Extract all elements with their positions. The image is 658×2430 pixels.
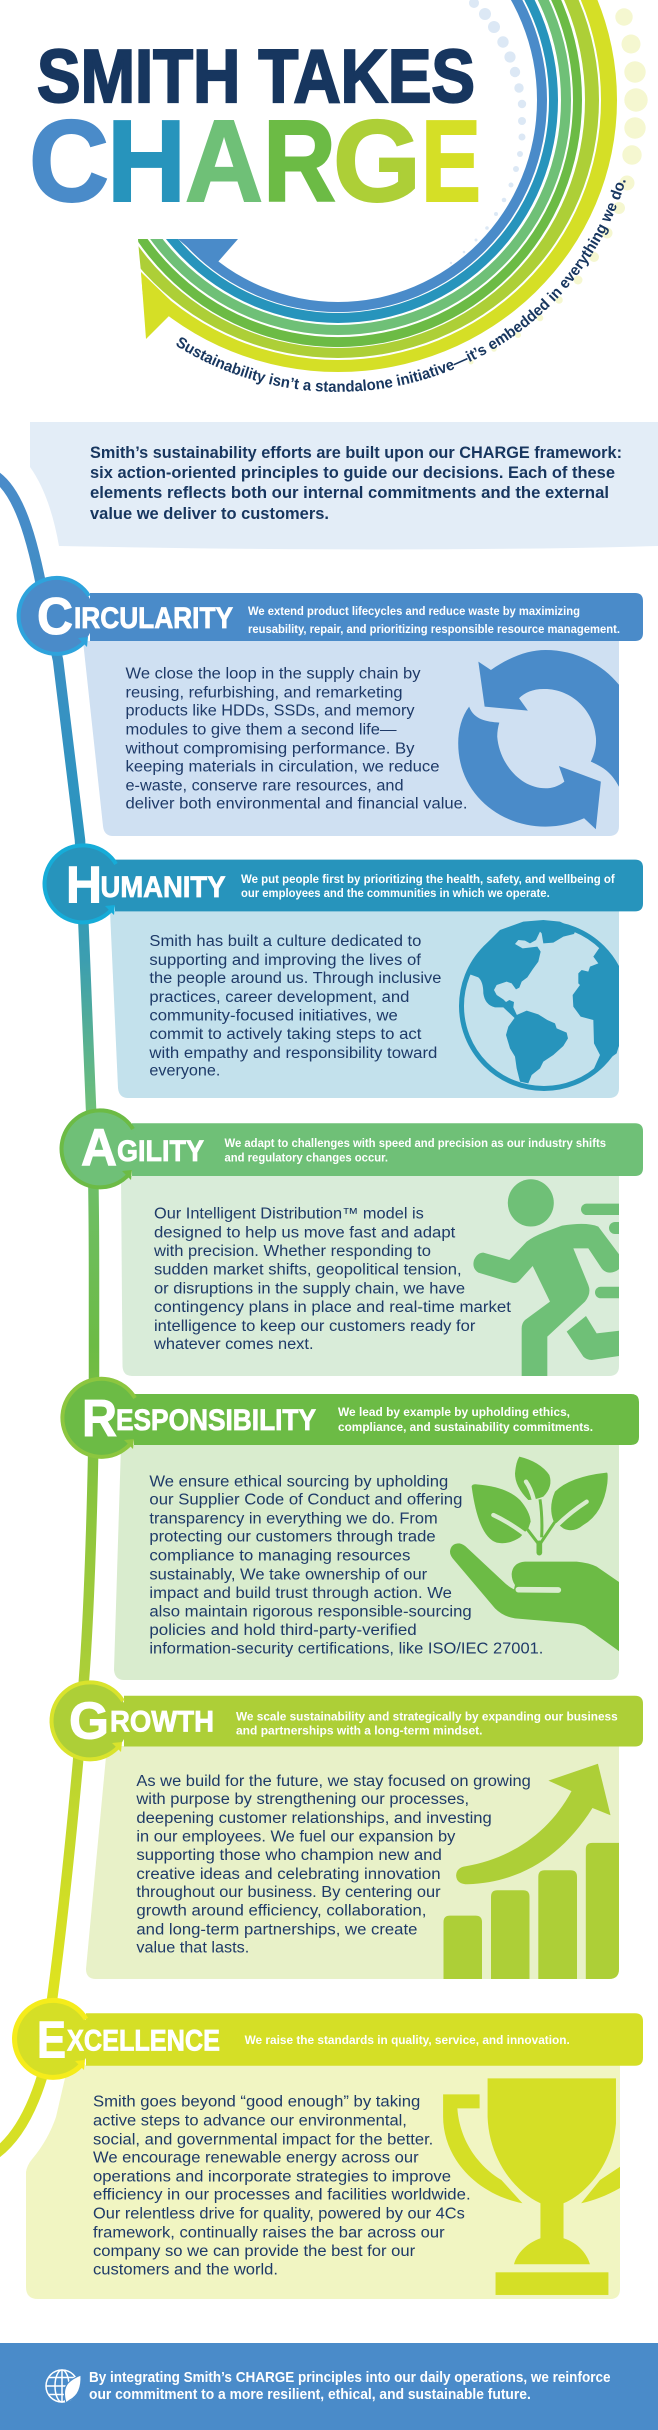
text: Responsibility body: information-security certifications, like ISO/IEC 27001. xyxy=(149,1641,543,1658)
text: Agility body: designed to help us move fast and adapt xyxy=(154,1224,456,1242)
banner: Agility: We adapt to challenges with speed and precision as our industry shifts xyxy=(224,1138,606,1150)
badge: Growth: G xyxy=(69,1692,109,1750)
text: Circularity body xyxy=(124,665,467,812)
text: Humanity body: everyone. xyxy=(149,1063,220,1080)
text: Growth body: creative ideas and celebrating innovation xyxy=(136,1866,441,1883)
title: CHARGE: G xyxy=(333,96,421,226)
text: Growth body: and long-term partnerships, we create xyxy=(136,1922,417,1938)
footer band xyxy=(0,2343,658,2430)
badge: Responsibility xyxy=(62,1379,316,1457)
text: Responsibility body: compliance to managing resources xyxy=(149,1547,411,1564)
badge: Responsibility: R xyxy=(82,1390,117,1448)
text: Responsibility body: policies and hold third-party-verified xyxy=(149,1622,417,1639)
text: Circularity body: deliver both environmental and financial value. xyxy=(126,795,467,812)
icon: globe with leaf xyxy=(46,2370,81,2403)
section: Humanity xyxy=(45,845,643,1098)
banner: Circularity: We extend product lifecycles and reduce waste by maximizing xyxy=(248,606,580,618)
banner: Excellence: We raise the standards in quality, service, and innovation. xyxy=(245,2035,570,2047)
text: Circularity body: modules to give them a second life— xyxy=(126,721,397,738)
text: Growth body: value that lasts. xyxy=(136,1940,249,1957)
text: Agility body: sudden market shifts, geopolitical tension, xyxy=(154,1262,462,1279)
panel: Agility body xyxy=(121,1176,619,1376)
rainbow circular arrow xyxy=(138,0,617,372)
badge: Responsibility: ESPONSIBILITY xyxy=(116,1404,316,1437)
banner: Responsibility: We lead by example by upholding ethics, xyxy=(338,1407,570,1419)
text: Responsibility body xyxy=(149,1474,543,1658)
title: Smith Takes: SMITH TAKES xyxy=(37,34,475,118)
text: Excellence body: Our relentless drive for quality, powered by our 4Cs xyxy=(93,2206,465,2223)
text: closing statement: By integrating Smith’s CHARGE principles into our daily operations, we reinforce xyxy=(89,2369,610,2386)
title: CHARGE: H xyxy=(107,96,186,226)
text: Excellence body xyxy=(93,2094,471,2279)
badge: Circularity xyxy=(18,578,233,654)
text: Agility body: intelligence to keep our customers ready for xyxy=(154,1318,475,1335)
text: Growth body: deepening customer relationships, and investing xyxy=(136,1810,492,1827)
text: Excellence body: operations and incorporate strategies to improve xyxy=(93,2169,451,2186)
panel: Responsibility body xyxy=(114,1445,619,1680)
text: Responsibility body: sustainably, We take ownership of our xyxy=(149,1567,427,1584)
title: CHARGE: R xyxy=(263,96,336,226)
text: Circularity body: products like HDDs, SSDs, and memory xyxy=(126,702,415,719)
banner: Growth: and partnerships with a long-term mindset. xyxy=(236,1725,482,1737)
panel: Excellence body xyxy=(26,2065,620,2299)
badge: Humanity: H xyxy=(66,856,102,914)
banner: Responsibility: compliance, and sustainability commitments. xyxy=(338,1422,593,1434)
text: Responsibility body: protecting our customers through trade xyxy=(149,1529,436,1546)
badge: Agility: GILITY xyxy=(117,1135,204,1168)
section: Growth xyxy=(52,1682,643,1990)
text: Excellence body: customers and the world. xyxy=(93,2262,278,2279)
text: Growth body: growth around efficiency, collaboration, xyxy=(136,1903,426,1920)
badge: Growth xyxy=(52,1682,214,1760)
text: Humanity body: community-focused initiatives, we xyxy=(149,1008,398,1025)
text: Circularity body: reusing, refurbishing, and remarketing xyxy=(126,684,402,701)
text: Growth body: As we build for the future, we stay focused on growing xyxy=(136,1773,531,1790)
text: Agility body: or disruptions in the supply chain, we have xyxy=(154,1281,465,1298)
banner: Growth: We scale sustainability and strategically by expanding our business xyxy=(236,1711,618,1723)
text: Excellence body: social, and governmental impact for the better. xyxy=(93,2132,433,2149)
banner: Humanity: our employees and the communities in which we operate. xyxy=(241,888,550,900)
text: Growth body: with purpose by strengthening our processes, xyxy=(135,1791,469,1808)
banner: Responsibility xyxy=(134,1394,639,1445)
badge: Circularity: C xyxy=(37,588,73,646)
banner: Excellence xyxy=(86,2013,643,2066)
text: Excellence body: framework, continually raises the bar across our xyxy=(93,2225,445,2242)
text: closing statement xyxy=(89,2369,610,2403)
text: Agility body: whatever comes next. xyxy=(153,1336,314,1353)
text: Responsibility body: We ensure ethical sourcing by upholding xyxy=(149,1474,448,1490)
section: Agility xyxy=(62,1110,645,1380)
text: Responsibility body: also maintain rigorous responsible-sourcing xyxy=(149,1604,472,1621)
text: closing statement: our commitment to a more resilient, ethical, and sustainable future. xyxy=(89,2386,531,2403)
text: Excellence body: active steps to advance our environmental, xyxy=(93,2113,407,2130)
intro panel xyxy=(30,422,658,550)
text: Circularity body: keeping materials in circulation, we reduce xyxy=(126,758,440,775)
banner: Circularity xyxy=(90,593,643,641)
title: CHARGE xyxy=(29,96,481,226)
icon: hand holding plant xyxy=(450,1457,627,1657)
text: Growth body xyxy=(135,1773,531,1957)
text: Responsibility body: transparency in everything we do. From xyxy=(149,1510,438,1528)
text: Circularity body: without compromising performance. By xyxy=(124,740,415,757)
timeline line xyxy=(0,475,94,2155)
text: Circularity body: We close the loop in the supply chain by xyxy=(126,665,421,682)
section: Excellence xyxy=(14,2000,643,2299)
text: Humanity body: Smith has built a culture dedicated to xyxy=(149,933,421,950)
banner: Humanity: We put people first by prioritizing the health, safety, and wellbeing of xyxy=(241,874,615,886)
badge: Agility xyxy=(62,1110,204,1187)
badge: Humanity: UMANITY xyxy=(100,871,226,904)
text: Humanity body: the people around us. Through inclusive xyxy=(149,970,441,987)
section: Responsibility xyxy=(62,1379,639,1680)
text: Humanity body xyxy=(148,933,441,1080)
title: CHARGE: E xyxy=(421,96,481,226)
banner: Agility xyxy=(132,1123,643,1176)
text: Agility body: with precision. Whether responding to xyxy=(153,1243,431,1260)
text: Excellence body: efficiency in our processes and facilities worldwide. xyxy=(93,2186,471,2203)
text: Humanity body: with empathy and responsibility toward xyxy=(148,1045,437,1062)
text: Humanity body: supporting and improving the lives of xyxy=(149,952,422,969)
text: Agility body xyxy=(153,1206,512,1353)
banner: Circularity: reusability, repair, and prioritizing responsible resource management. xyxy=(248,624,620,636)
text: Excellence body: company so we can provide the best for our xyxy=(93,2243,415,2260)
title: CHARGE: A xyxy=(185,96,263,226)
decorative yellow dots xyxy=(468,8,648,365)
icon: trophy xyxy=(443,2078,625,2295)
text: Agility body: Our Intelligent Distribution™ model is xyxy=(154,1206,424,1223)
text: Excellence body: We encourage renewable energy across our xyxy=(93,2150,419,2167)
intro panel: Smith’s sustainability efforts are built upon our CHARGE framework: xyxy=(90,444,622,462)
icon: runner xyxy=(473,1179,619,1376)
panel: Growth body xyxy=(86,1746,619,1979)
section: Circularity xyxy=(18,578,643,836)
badge: Excellence: XCELLENCE xyxy=(67,2025,220,2058)
decorative blue dots xyxy=(450,0,526,264)
badge: Growth: ROWTH xyxy=(110,1706,214,1739)
text: Agility body: contingency plans in place and real-time market xyxy=(154,1299,512,1316)
badge: Excellence xyxy=(14,2000,220,2078)
icon: recycle arrows xyxy=(458,650,634,829)
badge: Excellence: E xyxy=(37,2012,66,2070)
curved tagline: Sustainability isn’t a standalone initiative—it’s embedded in everything we do. xyxy=(176,180,626,392)
text: Growth body: in our employees. We fuel our expansion by xyxy=(136,1828,456,1845)
text: Circularity body: e-waste, conserve rare resources, and xyxy=(126,777,404,794)
icon: globe xyxy=(462,920,627,1088)
text: Humanity body: practices, career development, and xyxy=(149,989,409,1006)
badge: Humanity xyxy=(45,845,226,922)
banner: Humanity xyxy=(115,860,643,911)
text: Excellence body: Smith goes beyond “good enough” by taking xyxy=(93,2094,420,2111)
text: Humanity body: commit to actively taking steps to act xyxy=(149,1026,422,1043)
intro panel: six action-oriented principles to guide our decisions. Each of these xyxy=(90,464,615,482)
icon: growth bars and arrow xyxy=(444,1764,619,1979)
text: Growth body: throughout our business. By centering our xyxy=(136,1884,441,1901)
text: Responsibility body: impact and build trust through action. We xyxy=(149,1585,452,1602)
banner: Growth xyxy=(124,1696,643,1746)
panel: Circularity body xyxy=(83,641,619,836)
banner: Agility: and regulatory changes occur. xyxy=(224,1152,388,1164)
intro panel: elements reflects both our internal commitments and the external xyxy=(90,484,609,502)
text: Growth body: supporting those who champion new and xyxy=(136,1847,442,1864)
title: CHARGE: C xyxy=(29,96,109,226)
badge: Circularity: IRCULARITY xyxy=(74,602,233,635)
panel: Humanity body xyxy=(110,911,619,1098)
text: Responsibility body: our Supplier Code of Conduct and offering xyxy=(149,1492,462,1509)
badge: Agility: A xyxy=(81,1119,117,1177)
intro panel: value we deliver to customers. xyxy=(90,505,329,523)
